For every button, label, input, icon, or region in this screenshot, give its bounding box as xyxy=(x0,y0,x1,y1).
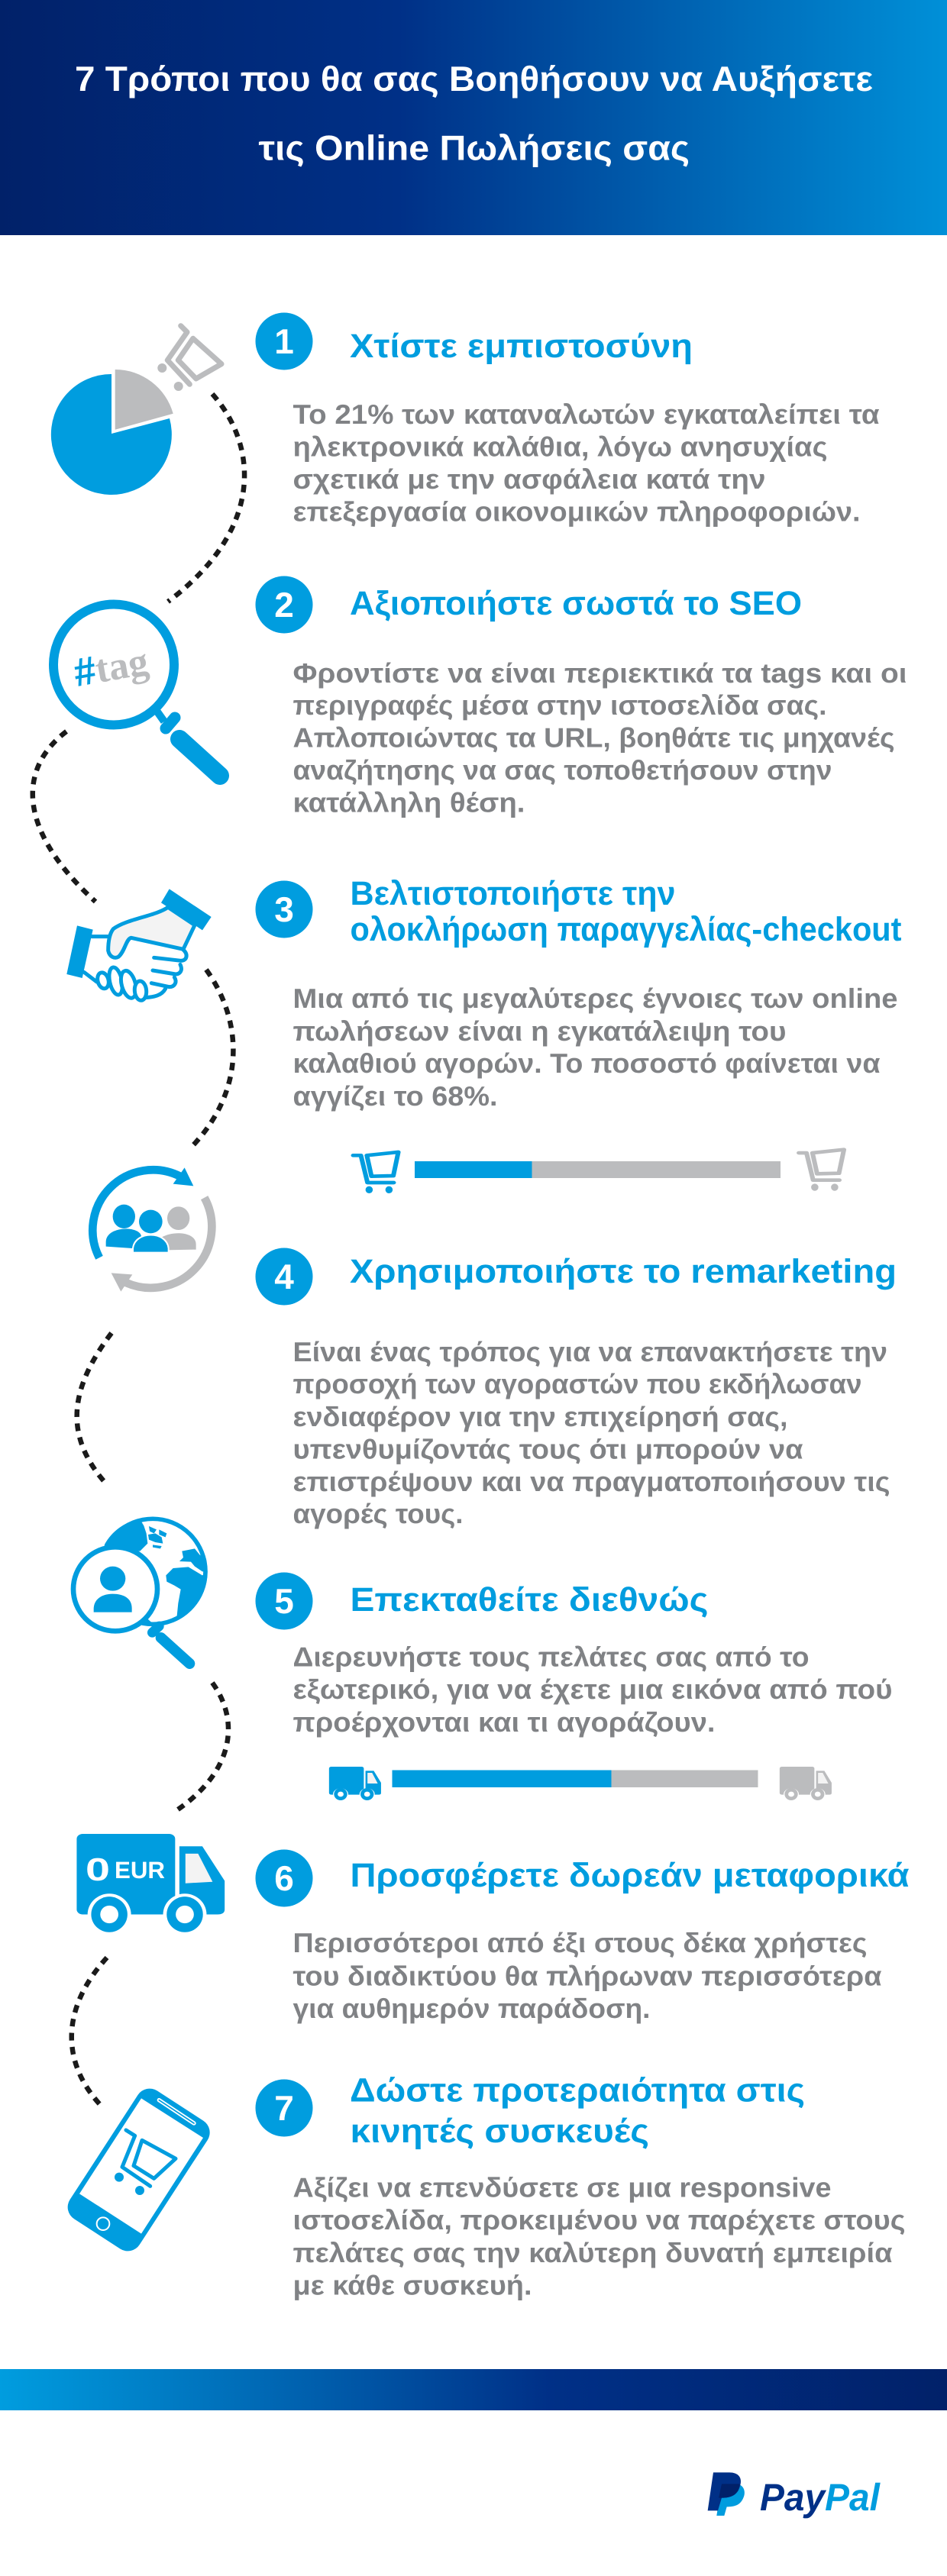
body text 2 xyxy=(293,657,907,818)
body text 7: πελάτες σας την καλύτερη δυνατή εμπειρία xyxy=(293,2237,892,2268)
icon: PayPal monogram xyxy=(708,2472,745,2516)
body text 4 xyxy=(293,1336,890,1529)
number badge 4 xyxy=(255,1248,313,1306)
body text 7: ιστοσελίδα, προκειμένου να παρέχετε στους xyxy=(293,2204,906,2235)
icon: smartphone with cart xyxy=(63,2084,215,2256)
number badge 3 xyxy=(255,881,313,938)
icon: gray cart xyxy=(799,1150,844,1191)
wordmark: PayPal xyxy=(760,2476,881,2519)
body text 3 xyxy=(293,983,898,1112)
heading 6: Προσφέρετε δωρεάν μεταφορικά xyxy=(350,1857,909,1894)
number badge 6: 6 xyxy=(274,1858,294,1898)
icon: tilted gray shopping cart xyxy=(157,326,221,391)
body text 4: Είναι ένας τρόπος για να επανακτήσετε την xyxy=(293,1336,887,1367)
body text 7: Αξίζει να επενδύσετε σε μια responsive xyxy=(293,2171,831,2203)
icon: globe with person magnifier xyxy=(73,1519,208,1664)
body text 3: πωλήσεων είναι η εγκατάλειψη του xyxy=(293,1015,787,1047)
PayPal logo xyxy=(708,2472,881,2519)
title xyxy=(75,59,873,168)
icon: delivery truck 0 EUR xyxy=(76,1834,225,1935)
body text 2: περιγραφές μέσα στην ιστοσελίδα σας. xyxy=(293,689,826,721)
hashtag label: #tag xyxy=(70,639,151,696)
dashed path: remarketing to globe xyxy=(77,1333,112,1481)
body text 1: ηλεκτρονικά καλάθια, λόγω ανησυχίας xyxy=(293,431,828,463)
number badge 1: 1 xyxy=(274,321,294,361)
body text 1: σχετικά με την ασφάλεια κατά την xyxy=(293,463,765,495)
body text 2: αναζήτησης να σας τοποθετήσουν στην xyxy=(293,754,832,786)
icon: blue cart xyxy=(354,1152,399,1193)
header banner xyxy=(0,0,947,235)
body text 5 xyxy=(293,1641,892,1738)
bar chart: cart abandonment 68 percent xyxy=(354,1150,844,1193)
body text 6: για αυθημερόν παράδοση. xyxy=(293,1993,651,2024)
body text 2: Φροντίστε να είναι περιεκτικά τα tags και οι xyxy=(293,657,907,689)
body text 5: Διερευνήστε τους πελάτες σας από το xyxy=(293,1641,810,1672)
number badge 2 xyxy=(255,576,313,634)
dashed path: handshake to remarketing xyxy=(192,970,233,1147)
title: τις Online Πωλήσεις σας xyxy=(258,128,690,168)
panel: step 2 xyxy=(255,576,907,818)
heading 3: ολοκλήρωση παραγγελίας-checkout xyxy=(350,911,902,948)
icon: pie chart 21 percent xyxy=(51,370,173,495)
body text 4: προσοχή των αγοραστών που εκδήλωσαν xyxy=(293,1368,861,1399)
heading 2: Αξιοποιήστε σωστά το SEO xyxy=(350,585,802,622)
number badge 7: 7 xyxy=(274,2088,294,2128)
panel: step 3 xyxy=(255,875,902,1112)
number badge 5: 5 xyxy=(274,1581,294,1621)
panel: step 1 xyxy=(255,313,880,527)
body text 4: υπενθυμίζοντάς τους ότι μπορούν να xyxy=(293,1434,803,1464)
body text 3: καλαθιού αγορών. Το ποσοστό φαίνεται να xyxy=(293,1048,880,1079)
number badge 3: 3 xyxy=(274,889,294,929)
heading 3 xyxy=(350,875,902,948)
icon: delivery truck 0 EUR: EUR xyxy=(115,1857,165,1884)
icon: delivery truck 0 EUR: 0 xyxy=(86,1851,110,1887)
panel: step 4 xyxy=(255,1248,897,1529)
heading 4: Χρησιμοποιήστε το remarketing xyxy=(350,1253,897,1290)
body text 5: εξωτερικό, για να έχετε μια εικόνα από πού xyxy=(293,1674,892,1705)
body text 7: με κάθε συσκευή. xyxy=(293,2269,532,2301)
body text 6: του διαδικτύου θα πλήρωναν περισσότερα xyxy=(293,1961,881,1991)
number badge 7 xyxy=(255,2080,313,2136)
bar chart: international shipping xyxy=(329,1767,832,1800)
body text 3: Μια από τις μεγαλύτερες έγνοιες των online xyxy=(293,983,898,1014)
heading 3: Βελτιστοποιήστε την xyxy=(350,875,675,912)
number badge 1 xyxy=(255,313,313,370)
body text 4: επιστρέψουν και να πραγματοποιήσουν τις xyxy=(293,1466,890,1497)
body text 6: Περισσότεροι από έξι στους δέκα χρήστες xyxy=(293,1927,868,1958)
icon: handshake xyxy=(66,889,212,1001)
heading 7 xyxy=(350,2072,805,2150)
number badge 6 xyxy=(255,1849,313,1907)
number badge 4: 4 xyxy=(274,1257,294,1296)
title: 7 Τρόποι που θα σας Βοηθήσουν να Αυξήσετε xyxy=(75,59,873,98)
heading 7: κινητές συσκευές xyxy=(350,2113,649,2150)
body text 1: Το 21% των καταναλωτών εγκαταλείπει τα xyxy=(293,399,880,430)
panel: step 5 xyxy=(255,1573,892,1738)
body text 2: κατάλληλη θέση. xyxy=(293,786,525,818)
body text 1 xyxy=(293,399,880,527)
body text 1: επεξεργασία οικονομικών πληροφοριών. xyxy=(293,496,860,527)
panel: step 7 xyxy=(255,2072,906,2301)
body text 3: αγγίζει το 68%. xyxy=(293,1080,498,1112)
body text 6 xyxy=(293,1927,881,2024)
icon: small gray truck xyxy=(780,1767,832,1800)
body text 5: προέρχονται και τι αγοράζουν. xyxy=(293,1706,715,1738)
body text 4: ενδιαφέρον για την επιχείρησή σας, xyxy=(293,1401,788,1432)
number badge 2: 2 xyxy=(274,585,294,625)
dashed path: globe to truck xyxy=(178,1683,228,1809)
body text 4: αγορές τους. xyxy=(293,1498,463,1529)
dashed path: pie to magnifier xyxy=(168,394,244,602)
body text 2: Απλοποιώντας τα URL, βοηθάτε τις μηχανές xyxy=(293,722,895,753)
body text 7 xyxy=(293,2171,906,2301)
dashed path: truck to phone xyxy=(72,1958,107,2104)
panel: step 6 xyxy=(255,1849,909,2024)
footer gradient band xyxy=(0,2369,947,2410)
icon: remarketing audience cycle xyxy=(92,1167,212,1292)
heading 5: Επεκταθείτε διεθνώς xyxy=(350,1581,709,1619)
heading 7: Δώστε προτεραιότητα στις xyxy=(350,2072,805,2109)
icon: magnifier with tag xyxy=(53,605,220,776)
dashed path: magnifier to handshake xyxy=(33,731,95,902)
icon: small blue truck xyxy=(329,1767,381,1800)
heading 1: Χτίστε εμπιστοσύνη xyxy=(350,328,693,365)
number badge 5 xyxy=(255,1573,313,1629)
